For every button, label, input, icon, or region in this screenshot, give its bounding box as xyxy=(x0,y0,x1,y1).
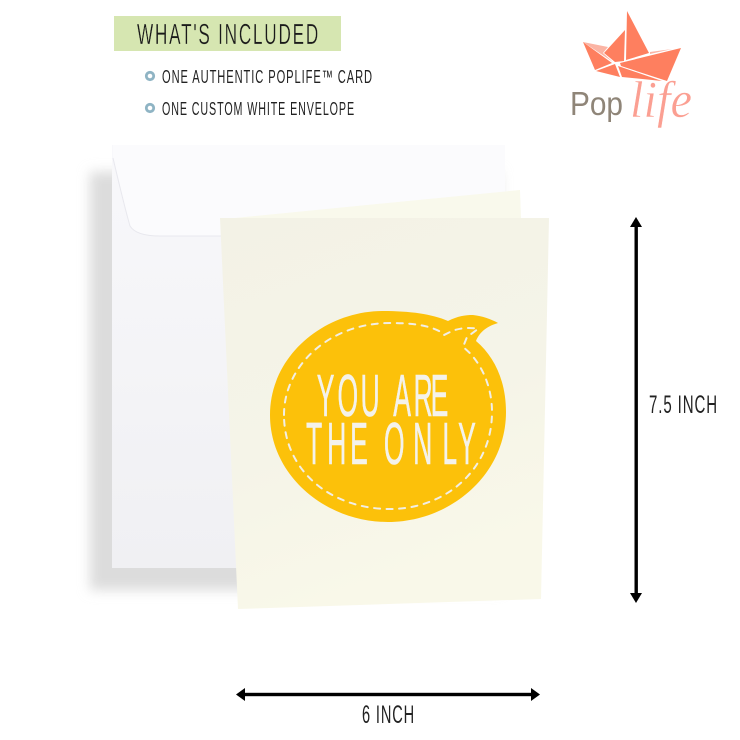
arrow: width xyxy=(236,688,540,701)
arrow: height xyxy=(630,217,642,603)
icon: origami boat xyxy=(583,11,681,81)
card back fold xyxy=(235,190,521,218)
heading: what's included xyxy=(114,16,341,51)
logo: poplife xyxy=(570,11,692,129)
bubble text: THE ONLY xyxy=(306,411,476,477)
item: card: ONE AUTHENTIC POPLIFE™ CARD xyxy=(162,67,373,87)
item: envelope xyxy=(146,99,355,119)
card xyxy=(220,190,549,609)
envelope body xyxy=(112,145,505,568)
envelope flap xyxy=(113,145,505,236)
item: card xyxy=(146,67,373,87)
card front xyxy=(220,218,549,609)
label: 6 inch: 6 INCH xyxy=(362,701,415,729)
bubble text: YOU ARE xyxy=(317,363,448,429)
wordmark: life xyxy=(630,72,692,129)
stitched outline xyxy=(284,323,492,509)
bubble text xyxy=(306,363,476,477)
envelope shadow xyxy=(90,172,500,590)
speech bubble xyxy=(270,311,506,522)
item: envelope: ONE CUSTOM WHITE ENVELOPE xyxy=(162,99,355,119)
wordmark: Pop xyxy=(570,85,623,122)
heading: what's included: WHAT'S INCLUDED xyxy=(137,19,320,51)
envelope xyxy=(90,145,505,590)
list: included items xyxy=(146,67,373,119)
wordmark xyxy=(570,72,692,129)
